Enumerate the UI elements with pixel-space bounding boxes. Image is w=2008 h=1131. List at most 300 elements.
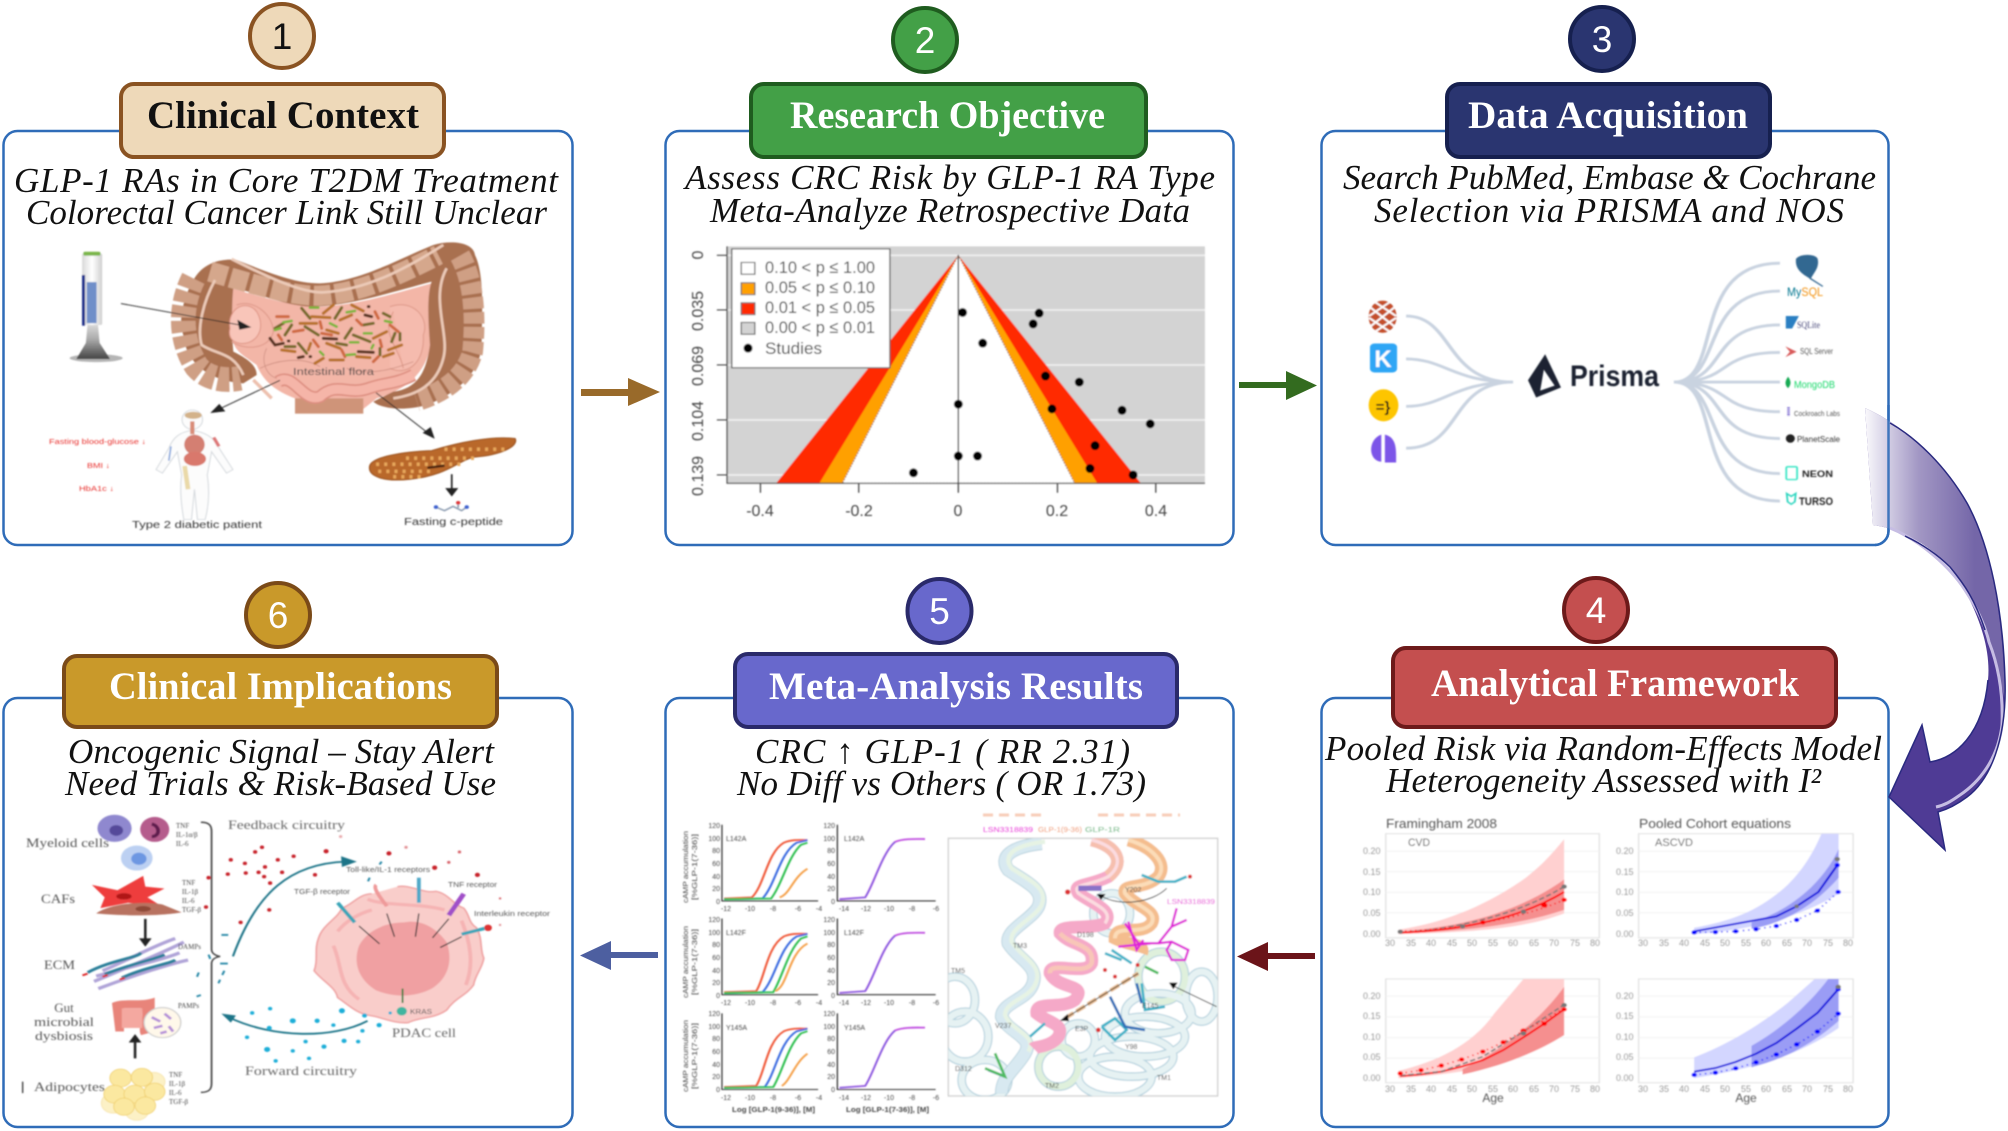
x axis tick labels: -10 [745,1095,755,1102]
arrow: step 2 to 3 [1239,371,1317,400]
y axis tick labels: 40 [827,874,835,881]
y axis tick labels: 120 [823,917,835,924]
y axis tick labels: 0.05 [1363,908,1381,918]
icon: myeloid cells [97,815,169,871]
y axis tick labels: 40 [827,968,835,975]
icon: pancreas [370,438,516,480]
arrow: curved step 3 to 4 [1865,405,2005,850]
icon: left provider 1 [1369,301,1397,333]
cell type labels: CAFs [41,891,75,906]
icon: postgres elephant [1797,255,1823,286]
x axis tick labels: 80 [1843,1084,1853,1094]
legend labels: 0.05 < p ≤ 0.10 [765,278,875,297]
charts: risk by age [1363,816,1853,1105]
y axis labels: 0 [690,250,707,259]
x axis tick labels: -6 [795,1095,801,1102]
x axis tick labels [1385,938,1853,1094]
mutant labels and axis titles: L142A [844,836,865,843]
number badge 6: 6 [268,595,288,636]
mutant labels and axis titles: L142A [726,836,747,843]
legend labels: 0.10 < p ≤ 1.00 [765,258,875,277]
legend box [732,249,890,368]
chart: bottom left [1398,979,1567,1078]
database names: SQLite [1797,320,1820,330]
signal arrows [359,913,462,947]
y axis tick labels: 0.20 [1363,991,1381,1001]
y axis tick labels: 0.10 [1363,1032,1381,1042]
x axis tick labels: 45 [1447,1084,1457,1094]
icon: molecule [434,501,469,511]
x axis tick labels: -8 [770,906,776,913]
cell type labels: microbial [34,1014,94,1029]
number badge 1: 1 [272,16,292,57]
x axis tick labels: 60 [1761,1084,1771,1094]
y axis tick labels: 0.15 [1363,867,1381,877]
x axis tick labels: -8 [909,1095,915,1102]
y axis tick labels: 80 [712,1036,720,1043]
structure labels: GLP-1R [1085,827,1120,834]
icon: adipocytes [101,1068,165,1120]
x axis tick labels: -6 [933,906,939,913]
mutant labels and axis titles: Log [GLP-1(7-36)], [M] [846,1107,929,1114]
icon: human body [156,410,233,520]
mutant labels and axis titles: [%GLP-1(7-36)] [692,1023,699,1089]
x axis tick labels: 65 [1529,938,1539,948]
x axis tick labels: 40 [1679,1084,1689,1094]
x axis tick labels: -4 [816,1095,822,1102]
heading: data acquisition: Data Acquisition [1468,94,1748,137]
y axis tick labels: 40 [712,968,720,975]
number badge 3: 3 [1592,19,1612,60]
y axis tick labels [1363,846,1634,1083]
y axis tick labels: 0.10 [1616,887,1634,897]
x axis tick labels: 30 [1385,938,1395,948]
y axis tick labels [708,823,835,1094]
subtitle: Assess CRC Risk by GLP-1 RA Type [683,158,1215,197]
charts: dose response curves [683,815,1218,1114]
x axis tick labels: -12 [721,1000,731,1007]
structure labels: GLP-1(9-36) [1038,827,1082,834]
icon: injection pen [70,252,123,362]
structure labels: LSN3318839 [1167,899,1215,906]
y axis tick labels: 0.05 [1363,1052,1381,1062]
x axis tick labels: 80 [1590,1084,1600,1094]
mutant labels and axis titles: L142F [844,930,864,937]
x axis tick labels: 45 [1700,1084,1710,1094]
cytokine labels: PAMPs [178,1002,199,1010]
y axis labels: 0.069 [690,346,707,386]
y axis tick labels: 60 [712,861,720,868]
y axis tick labels: 60 [827,1049,835,1056]
curve row 2 [722,918,936,995]
structure labels: D198 [1077,932,1094,939]
x axis tick labels: 30 [1638,1084,1648,1094]
heading: analytical framework [1393,648,1836,727]
cell type labels: Gut [54,1000,74,1015]
x axis tick labels: 55 [1488,1084,1498,1094]
y axis tick labels: 120 [708,917,720,924]
curved circuitry arrows [229,862,368,1034]
protein structure view [935,838,1218,1100]
subtitle: GLP-1 RAs in Core T2DM Treatment [14,161,559,200]
x axis tick labels: 50 [1720,1084,1730,1094]
effect labels in red: HbA1c ↓ [79,486,114,493]
x axis tick labels: 65 [1782,1084,1792,1094]
heading: clinical context: Clinical Context [147,94,419,137]
subtitle [736,732,1146,803]
cytokine labels: TNF [182,879,195,887]
x axis tick labels: 40 [1679,938,1689,948]
panel: clinical context [4,4,572,545]
cytokine labels: TGF-β [169,1098,189,1106]
left icon glyphs: =} [1376,399,1390,416]
y axis tick labels: 0 [716,993,720,1000]
x axis tick labels: 45 [1447,938,1457,948]
x axis tick labels: -12 [721,906,731,913]
x axis tick labels: 40 [1426,938,1436,948]
x axis tick labels [721,906,939,1102]
y axis tick labels: 20 [827,980,835,987]
y axis tick labels: 80 [827,1036,835,1043]
subtitle [1343,158,1876,230]
effect labels in red [49,439,146,493]
diagram: tumor signaling circuitry [23,815,553,1120]
x axis tick labels: 80 [1590,938,1600,948]
panel: meta-analysis results [666,579,1234,1127]
database names: TURSO [1799,496,1833,508]
panel: data acquisition [1322,7,1888,545]
teal fragments near brace [197,862,382,996]
y axis tick labels: 80 [827,848,835,855]
y axis tick labels: 0.00 [1616,929,1634,939]
x axis tick labels: 50 [1467,1084,1477,1094]
cell type labels: dysbiosis [35,1028,93,1043]
x axis tick labels: 60 [1508,938,1518,948]
wordmark: prisma: Prisma [1570,360,1659,393]
chart titles: Framingham 2008 [1386,816,1497,831]
subtitle: Search PubMed, Embase & Cochrane [1343,158,1876,197]
y axis tick labels: 0.05 [1616,1052,1634,1062]
subtitle [64,732,496,803]
x axis tick labels: -10 [745,906,755,913]
y axis tick labels: 0.00 [1616,1073,1634,1083]
database names: MySQL [1787,285,1823,299]
x axis tick labels: 45 [1700,938,1710,948]
y axis tick labels: 40 [712,874,720,881]
x axis tick labels: 65 [1529,1084,1539,1094]
y axis labels: 0.035 [690,291,707,331]
x axis tick labels: -14 [839,1095,849,1102]
left icon glyphs [1374,346,1392,416]
chart titles: Pooled Cohort equations [1639,816,1792,831]
y axis tick labels: 0 [831,993,835,1000]
x axis tick labels: 50 [1467,938,1477,948]
icon: mongodb leaf [1786,377,1790,388]
y axis tick labels: 100 [708,1024,720,1031]
x axis tick labels: 75 [1823,1084,1833,1094]
curve row 1 [722,825,936,901]
connector lines [1406,263,1780,501]
y axis tick labels: 0.15 [1363,1011,1381,1021]
structure labels: Y98 [1125,1044,1138,1051]
subtitle: Pooled Risk via Random-Effects Model [1324,729,1882,768]
subtitle: Selection via PRISMA and NOS [1374,191,1844,230]
structure labels: LSN3318839 [983,827,1033,834]
receptor labels: Toll-like/IL-1 receptors [346,867,431,874]
y axis tick labels: 0.05 [1616,908,1634,918]
y axis tick labels: 100 [823,930,835,937]
icon: planetscale [1786,434,1795,443]
y axis tick labels: 20 [712,886,720,893]
structure labels: Y202 [1125,887,1141,894]
x axis tick labels: -10 [884,906,894,913]
database names: NEON [1802,469,1833,479]
receptors [338,878,487,934]
x axis tick labels: -4 [816,1000,822,1007]
y axis tick labels: 120 [823,1011,835,1018]
y axis tick labels: 20 [712,1074,720,1081]
chart: ASCVD top right [1691,834,1841,935]
left icon glyphs: K [1374,346,1392,373]
receptor labels: TGF-β receptor [294,889,351,896]
cytokine labels: IL-1α/β [176,831,198,839]
x axis tick labels: 35 [1659,1084,1669,1094]
y axis tick labels: 100 [823,836,835,843]
icon: turso [1787,494,1796,504]
structure labels: E145 [1142,1003,1158,1010]
illustration: gut, pen, body, pancreas [49,242,516,531]
receptor labels [294,867,551,1016]
number badge 6 [246,583,310,647]
database names: SQL Server [1800,347,1833,356]
y axis tick labels: 100 [823,1024,835,1031]
number badge 1 [250,4,314,68]
number badge 5 [908,579,972,643]
x axis tick labels: -4 [816,906,822,913]
cytokine labels: TGF-β [182,906,202,914]
chart titles [1386,816,1792,1105]
circuitry labels [228,817,456,1078]
heading: research objective [751,84,1146,157]
legend labels: 0.01 < p ≤ 0.05 [765,298,875,317]
cell type labels: ECM [44,957,75,972]
subtitle: Need Trials & Risk-Based Use [64,764,496,803]
x axis tick labels: -6 [933,1095,939,1102]
y axis tick labels: 120 [708,823,720,830]
chart titles: CVD [1408,837,1430,849]
y axis tick labels: 0 [716,1087,720,1094]
y axis tick labels: 40 [712,1062,720,1069]
panel: analytical framework [1322,578,1888,1127]
circuitry labels: Feedback circuitry [228,817,346,832]
number badge 3 [1570,7,1634,71]
x axis tick labels: 60 [1508,1084,1518,1094]
x axis tick labels: -6 [933,1000,939,1007]
x axis tick labels: -12 [861,1095,871,1102]
y axis tick labels: 0.20 [1616,991,1634,1001]
icon: cockroach [1786,407,1792,416]
chart titles: Age [1482,1091,1504,1105]
cytokine labels: IL-6 [176,840,189,848]
y axis tick labels: 0 [716,899,720,906]
x axis tick labels: 35 [1406,1084,1416,1094]
x axis tick labels: 30 [1385,1084,1395,1094]
label: type 2 diabetic patient: Type 2 diabetic patient [132,520,262,531]
receptor labels: TNF receptor [448,882,498,889]
heading: clinical implications [64,656,497,727]
cytokine labels: IL-1β [182,888,198,896]
x axis tick labels: -6 [795,1000,801,1007]
mutant labels and axis titles: L142F [726,930,746,937]
legend labels [765,258,875,358]
y axis tick labels: 0.15 [1616,1011,1634,1021]
x axis labels [746,503,1167,520]
x axis tick labels: 50 [1720,938,1730,948]
x axis tick labels: -8 [770,1000,776,1007]
structure labels: D312 [955,1066,972,1073]
label: fasting c-peptide: Fasting c-peptide [404,517,504,528]
arrows to organs [121,304,457,496]
x axis tick labels: -8 [909,1000,915,1007]
receptor labels: KRAS [410,1009,432,1016]
x axis tick labels: -10 [745,1000,755,1007]
x axis tick labels: 30 [1638,938,1648,948]
panel: clinical implications [4,583,572,1127]
cytokine labels: IL-6 [169,1089,182,1097]
y axis labels: 0.104 [690,401,707,441]
structure labels: TM1 [1157,1075,1171,1082]
y axis labels [690,250,707,496]
x axis tick labels: -14 [839,906,849,913]
x axis tick labels: 75 [1570,938,1580,948]
cytokine labels: IL-1β [169,1080,185,1088]
heading: research objective: Research Objective [790,94,1105,137]
database names: PlanetScale [1797,435,1841,444]
number badge 5: 5 [929,591,950,632]
y axis tick labels: 80 [712,942,720,949]
mutant labels and axis titles: cAMP accumulation [683,831,690,903]
circuitry labels: Forward circuitry [245,1063,358,1078]
receptor labels: Interleukin receptor [474,911,551,918]
subtitle: Heterogeneity Assessed with I² [1385,761,1822,800]
x axis tick labels: 35 [1659,938,1669,948]
chart: CVD top left [1398,839,1567,934]
icon: left provider 3 [1369,389,1398,421]
y axis tick labels: 60 [712,1049,720,1056]
effect labels in red: Fasting blood-glucose ↓ [49,439,146,446]
x axis tick labels: 60 [1761,938,1771,948]
structure labels: TM5 [951,968,965,975]
chart: contour funnel plot [690,246,1205,520]
arrow: step 4 to 5 [1237,942,1315,971]
arrows on left column [129,919,151,1058]
cell type labels [26,835,109,1094]
mutant labels and axis titles: [%GLP-1(7-36)] [692,929,699,995]
x axis tick labels: -10 [884,1095,894,1102]
number badge 2 [893,8,957,72]
cytokine labels: IL-6 [182,897,195,905]
structure labels [951,827,1215,1090]
y axis tick labels: 100 [708,930,720,937]
icon: PDAC cell [314,886,484,1023]
x axis tick labels: -12 [861,1000,871,1007]
y axis tick labels: 20 [827,1074,835,1081]
number badge 4: 4 [1586,590,1606,631]
cytokine labels: TNF [176,822,189,830]
subtitle: No Diff vs Others ( OR 1.73) [736,764,1146,803]
mutant labels and axis titles: cAMP accumulation [683,1020,690,1092]
blue ligand dots [245,1007,392,1063]
structure labels: TM2 [1045,1083,1059,1090]
chart titles: ASCVD [1655,837,1693,849]
x axis tick labels: 55 [1741,1084,1751,1094]
y axis tick labels: 60 [712,955,720,962]
y axis tick labels: 0.20 [1363,846,1381,856]
chart titles: Age [1735,1091,1757,1105]
mutant labels and axis titles: Y145A [726,1025,747,1032]
x axis tick labels: 40 [1426,1084,1436,1094]
x axis tick labels: 55 [1488,938,1498,948]
database names: MongoDB [1794,380,1835,391]
y axis tick labels: 100 [708,836,720,843]
red ligand dots [204,835,501,926]
x axis tick labels: 70 [1802,938,1812,948]
x axis tick labels: 75 [1823,938,1833,948]
top faint color row [983,814,1180,816]
y axis tick labels: 0 [831,1087,835,1094]
brace [201,822,220,1092]
x axis tick labels: 80 [1843,938,1853,948]
structure labels: V237 [995,1023,1011,1030]
heading: clinical context [121,84,444,157]
structure labels: E3P [1075,1026,1089,1033]
icon: sqlite feather [1786,316,1799,329]
database names: Cockroach Labs [1794,411,1840,418]
y axis tick labels: 0 [831,899,835,906]
subtitle: CRC ↑ GLP-1 ( RR 2.31) [755,732,1130,771]
legend labels: Studies [765,339,822,358]
cytokine labels: DAMPs [178,943,201,951]
x axis tick labels: -14 [839,1000,849,1007]
bacteria cluster [270,305,402,363]
y axis tick labels: 20 [827,886,835,893]
mutant labels and axis titles [683,831,929,1114]
x axis tick labels: -12 [721,1095,731,1102]
arrow: step 1 to 2 [581,378,660,406]
y axis tick labels: 0.00 [1363,929,1381,939]
subtitle [14,161,559,232]
x axis tick labels: 70 [1802,1084,1812,1094]
heading: clinical implications: Clinical Implications [109,665,452,708]
x axis tick labels: 75 [1570,1084,1580,1094]
mutant labels and axis titles: Y145A [844,1025,865,1032]
x axis labels: -0.2 [845,503,873,520]
diagram: prisma connections [1369,255,1841,508]
y axis tick labels: 120 [823,823,835,830]
icon: neon [1786,467,1797,480]
y axis tick labels: 20 [712,980,720,987]
y axis tick labels: 120 [708,1011,720,1018]
icon: sql server [1785,346,1797,357]
heading: analytical framework: Analytical Framework [1431,662,1799,705]
x axis tick labels: 65 [1782,938,1792,948]
subtitle: Meta-Analyze Retrospective Data [709,191,1190,230]
icon: CAFs [92,876,182,915]
x axis tick labels: 35 [1406,938,1416,948]
legend labels: 0.00 < p ≤ 0.01 [765,318,875,337]
mutant labels and axis titles: cAMP accumulation [683,926,690,998]
subtitle: Colorectal Cancer Link Still Unclear [26,193,547,232]
